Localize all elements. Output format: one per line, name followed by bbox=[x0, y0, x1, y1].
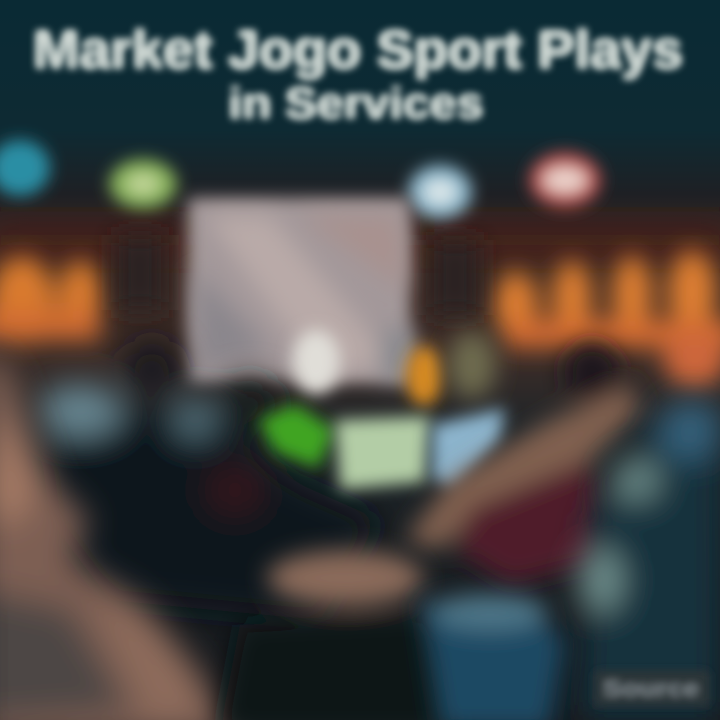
title glow: in Services bbox=[228, 79, 484, 128]
title text: in Services bbox=[228, 79, 484, 128]
olive figure on stage bbox=[448, 331, 496, 399]
pale blue phone screen bbox=[432, 408, 505, 490]
person at right in blue bbox=[578, 400, 720, 720]
watermark bbox=[594, 670, 710, 706]
icon: blue badge bbox=[0, 140, 50, 196]
title text bbox=[33, 20, 683, 128]
central screen bbox=[188, 198, 415, 382]
foreground hand: left bbox=[0, 350, 235, 720]
green phone screen bbox=[258, 404, 335, 468]
title text: Market Jogo Sport Plays bbox=[33, 20, 683, 80]
side dark columns bbox=[115, 235, 480, 315]
watermark: Source bbox=[603, 676, 699, 701]
foreground arm: centre bbox=[220, 550, 470, 720]
person in maroon bbox=[405, 342, 640, 585]
title glow bbox=[33, 20, 683, 128]
orange lights: left bbox=[0, 256, 102, 344]
icon: red badge bbox=[529, 152, 601, 208]
pale green phone screen bbox=[335, 416, 430, 490]
audience: dark mass bbox=[38, 340, 380, 620]
white light on stage bbox=[292, 330, 340, 394]
icon: light blue badge bbox=[408, 165, 472, 219]
orange lights: right bbox=[494, 250, 720, 388]
title glow: Market Jogo Sport Plays bbox=[33, 20, 683, 80]
title bbox=[33, 20, 683, 128]
icon: green badge bbox=[109, 159, 177, 209]
foreground sleeve: blue bbox=[420, 594, 565, 720]
dark red glow band bbox=[0, 225, 720, 255]
orange figure on stage bbox=[406, 346, 442, 406]
